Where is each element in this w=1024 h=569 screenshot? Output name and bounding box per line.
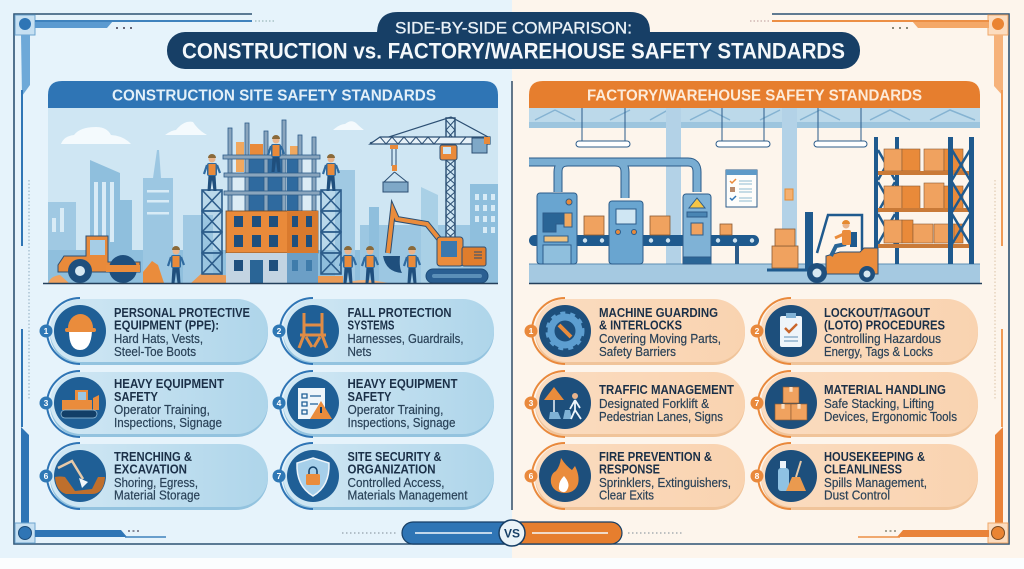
card: material handling: Safe Stacking, Lifting (824, 397, 934, 411)
card: lockout tagout: Controlling Hazardous (824, 332, 941, 346)
card: machine guarding: 1 (529, 326, 534, 336)
card: housekeeping (750, 443, 978, 510)
card: fall protection (272, 298, 494, 365)
icon: shield lock (297, 458, 329, 496)
pipes (529, 162, 697, 198)
corner decoration: bottom left (15, 329, 166, 543)
card: fall protection: Nets (348, 345, 372, 359)
icon: harness (299, 313, 327, 348)
card: site security: Controlled Access, (348, 476, 444, 490)
card: material handling: Devices, Ergonomic Tools (824, 410, 957, 424)
icon: gear wrench (547, 313, 583, 349)
card: PPE: EQUIPMENT (PPE): (114, 318, 219, 332)
forklift (767, 212, 878, 283)
background: right side (512, 0, 1024, 558)
card: heavy equipment 4: Inspections, Signage (348, 416, 456, 430)
card: machine guarding (524, 298, 745, 365)
card: fall protection: 2 (277, 326, 282, 336)
card: trenching: Material Storage (114, 488, 200, 502)
card: material handling: 7 (755, 398, 760, 408)
card: heavy equipment 4: SAFETY (348, 390, 392, 404)
scaffold left (202, 190, 222, 274)
card: heavy equipment 4: Operator Training, (348, 403, 444, 417)
card: lockout tagout: 2 (755, 326, 760, 336)
icon: spray bottle and broom (778, 461, 806, 491)
road roller (48, 236, 164, 284)
icon: bulldozer (61, 390, 99, 418)
storage rack (874, 137, 974, 264)
card: lockout tagout: (LOTO) PROCEDURES (824, 318, 945, 332)
card: machine guarding: MACHINE GUARDING (599, 306, 718, 320)
skyline windows (52, 182, 495, 242)
title line 2: CONSTRUCTION vs. FACTORY/WAREHOUSE SAFETY STANDARDS (182, 38, 845, 64)
ground line (43, 282, 498, 284)
building under construction (223, 120, 320, 283)
column sign (785, 189, 793, 200)
roof truss (529, 108, 980, 128)
vs badge (342, 520, 682, 546)
card: fire prevention: FIRE PREVENTION & (599, 450, 712, 464)
card: machine guarding: Covering Moving Parts, (599, 332, 721, 346)
ground (529, 264, 980, 284)
card: PPE: PERSONAL PROTECTIVE (114, 306, 250, 320)
card: heavy equipment 3: Operator Training, (114, 403, 210, 417)
card: lockout tagout (750, 298, 978, 365)
card: site security (272, 443, 494, 510)
tower crane (370, 117, 490, 265)
card: traffic management: TRAFFIC MANAGEMENT (599, 383, 734, 397)
title (167, 12, 860, 69)
card: traffic management: 3 (529, 398, 534, 408)
panel: factory illustration (529, 108, 982, 284)
dirt piles (190, 273, 392, 284)
card: heavy equipment 3: SAFETY (114, 390, 159, 404)
card: fall protection: Harnesses, Guardrails, (348, 332, 464, 346)
card: site security: ORGANIZATION (348, 462, 436, 476)
icon: flame (551, 458, 579, 493)
vs badge: VS (504, 526, 520, 540)
safety checklist (726, 170, 757, 207)
card: trenching: Shoring, Egress, (114, 476, 198, 490)
card: heavy equipment 3: 3 (44, 398, 49, 408)
center divider (511, 81, 513, 510)
icon: hard hat (65, 314, 96, 350)
card: housekeeping: Spills Management, (824, 476, 927, 490)
icon: stacked boxes (775, 387, 807, 420)
columns (666, 108, 681, 264)
conveyor (529, 235, 759, 264)
card: PPE (40, 298, 268, 365)
clouds (61, 121, 364, 144)
card: trenching: EXCAVATION (114, 462, 187, 476)
card: site security: 7 (277, 471, 282, 481)
card: PPE: Hard Hats, Vests, (114, 332, 203, 346)
corner decoration: top left (15, 15, 275, 400)
card: traffic management: Designated Forklift & (599, 397, 710, 411)
card: fire prevention (524, 443, 745, 510)
card: machine guarding: & INTERLOCKS (599, 318, 682, 332)
card: heavy equipment 4: HEAVY EQUIPMENT (348, 377, 458, 391)
card: trenching: 6 (44, 471, 49, 481)
heading: factory: FACTORY/WAREHOUSE SAFETY STANDARDS (587, 88, 922, 104)
card: fall protection: SYSTEMS (348, 318, 394, 332)
heading: factory (529, 81, 980, 108)
icon: clipboard (780, 313, 802, 347)
card: site security: Materials Management (348, 488, 468, 502)
card: heavy equipment 3 (40, 371, 268, 437)
card: traffic management: Pedestrian Lanes, Signs (599, 410, 723, 424)
title line 1: SIDE-BY-SIDE COMPARISON: (395, 18, 632, 38)
card: site security: SITE SECURITY & (348, 450, 442, 464)
scaffold right (321, 190, 341, 274)
card: lockout tagout: LOCKOUT/TAGOUT (824, 306, 930, 320)
icon: checklist warning (298, 388, 332, 419)
machines (537, 193, 711, 264)
card: housekeeping: 8 (755, 471, 760, 481)
workers (168, 135, 420, 283)
card: lockout tagout: Energy, Tags & Locks (824, 345, 933, 359)
card: machine guarding: Safety Barriers (599, 345, 676, 359)
background: left side (0, 0, 512, 558)
card: heavy equipment 4: 4 (277, 398, 282, 408)
card: fire prevention: 6 (529, 471, 534, 481)
panel: construction illustration (43, 108, 498, 284)
card: material handling (750, 371, 978, 437)
corner decoration: bottom right (858, 329, 1008, 543)
card: housekeeping: CLEANLINESS (824, 462, 902, 476)
card: material handling: MATERIAL HANDLING (824, 383, 946, 397)
conveyor boxes (584, 216, 732, 235)
card: housekeeping: Dust Control (824, 488, 890, 502)
icon: traffic sign and pedestrian (544, 387, 581, 419)
city skyline (48, 150, 498, 284)
card: heavy equipment 4 (272, 371, 494, 437)
card: traffic management (524, 371, 745, 437)
card: PPE: Steel-Toe Boots (114, 345, 196, 359)
card: fire prevention: Sprinklers, Extinguishers, (599, 476, 731, 490)
card: trenching: TRENCHING & (114, 450, 192, 464)
card: heavy equipment 3: HEAVY EQUIPMENT (114, 377, 224, 391)
pipes inner (529, 162, 697, 198)
card: heavy equipment 3: Inspections, Signage (114, 416, 222, 430)
icon: excavation (55, 461, 105, 494)
card: fire prevention: Clear Exits (599, 488, 654, 502)
card: PPE: 1 (44, 326, 49, 336)
heading: construction (48, 81, 498, 108)
sky (48, 108, 498, 284)
ceiling lights (576, 108, 867, 147)
excavator (383, 210, 488, 283)
card: trenching (40, 443, 268, 510)
corner decoration: top right (750, 15, 1008, 400)
card: fall protection: FALL PROTECTION (348, 306, 452, 320)
card: fire prevention: RESPONSE (599, 462, 660, 476)
heading: construction: CONSTRUCTION SITE SAFETY STANDARDS (112, 88, 436, 104)
card: housekeeping: HOUSEKEEPING & (824, 450, 925, 464)
